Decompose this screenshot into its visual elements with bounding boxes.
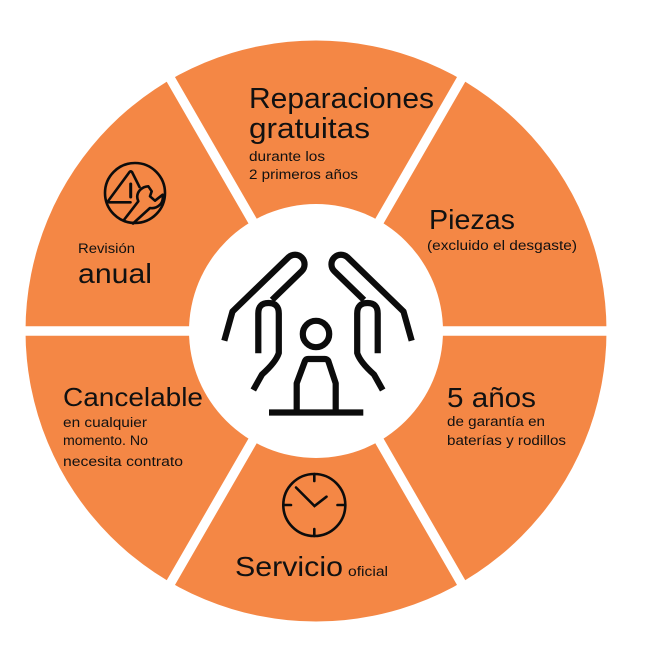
- panel: 5 años: [447, 382, 566, 448]
- panel: 5 años: de garantía en: [447, 414, 545, 429]
- panel: cancelable: necesita contrato: [63, 454, 183, 469]
- panel: cancelable: Cancelable: [63, 382, 203, 412]
- panel: reparaciones gratuitas: [249, 83, 434, 182]
- panel: 5 años: 5 años: [447, 382, 536, 413]
- panel: piezas: [427, 204, 577, 253]
- icon: hands protecting person: [224, 255, 412, 412]
- panel: revisión anual: Revisión: [78, 241, 135, 256]
- icon: person: [269, 321, 363, 412]
- panel: reparaciones gratuitas: durante los: [249, 149, 325, 164]
- icon: right hand: [331, 255, 412, 390]
- panel: servicio oficial: Servicio: [235, 551, 343, 582]
- panel: piezas: (excluido el desgaste): [427, 238, 577, 253]
- icon: warning triangle and wrench: [105, 163, 165, 224]
- panel: servicio oficial: oficial: [348, 564, 388, 579]
- panel: cancelable: en cualquier: [63, 415, 148, 430]
- panel: cancelable: momento. No: [63, 433, 148, 448]
- panel: reparaciones gratuitas: Reparaciones: [249, 83, 434, 115]
- orange wheel with six segments: [16, 40, 616, 622]
- panel: servicio oficial: [235, 474, 388, 582]
- icon: clock: [283, 474, 345, 536]
- panel: piezas: Piezas: [429, 204, 515, 235]
- panel: revisión anual: anual: [78, 258, 152, 289]
- panel: 5 años: baterías y rodillos: [447, 433, 566, 448]
- centre white circle with protection icon: [189, 204, 443, 458]
- panel: reparaciones gratuitas: 2 primeros años: [249, 167, 358, 182]
- panel: cancelable: [63, 382, 203, 469]
- panel: revisión anual: [78, 163, 165, 289]
- icon: left hand: [224, 255, 305, 390]
- panel: reparaciones gratuitas: gratuitas: [249, 113, 370, 145]
